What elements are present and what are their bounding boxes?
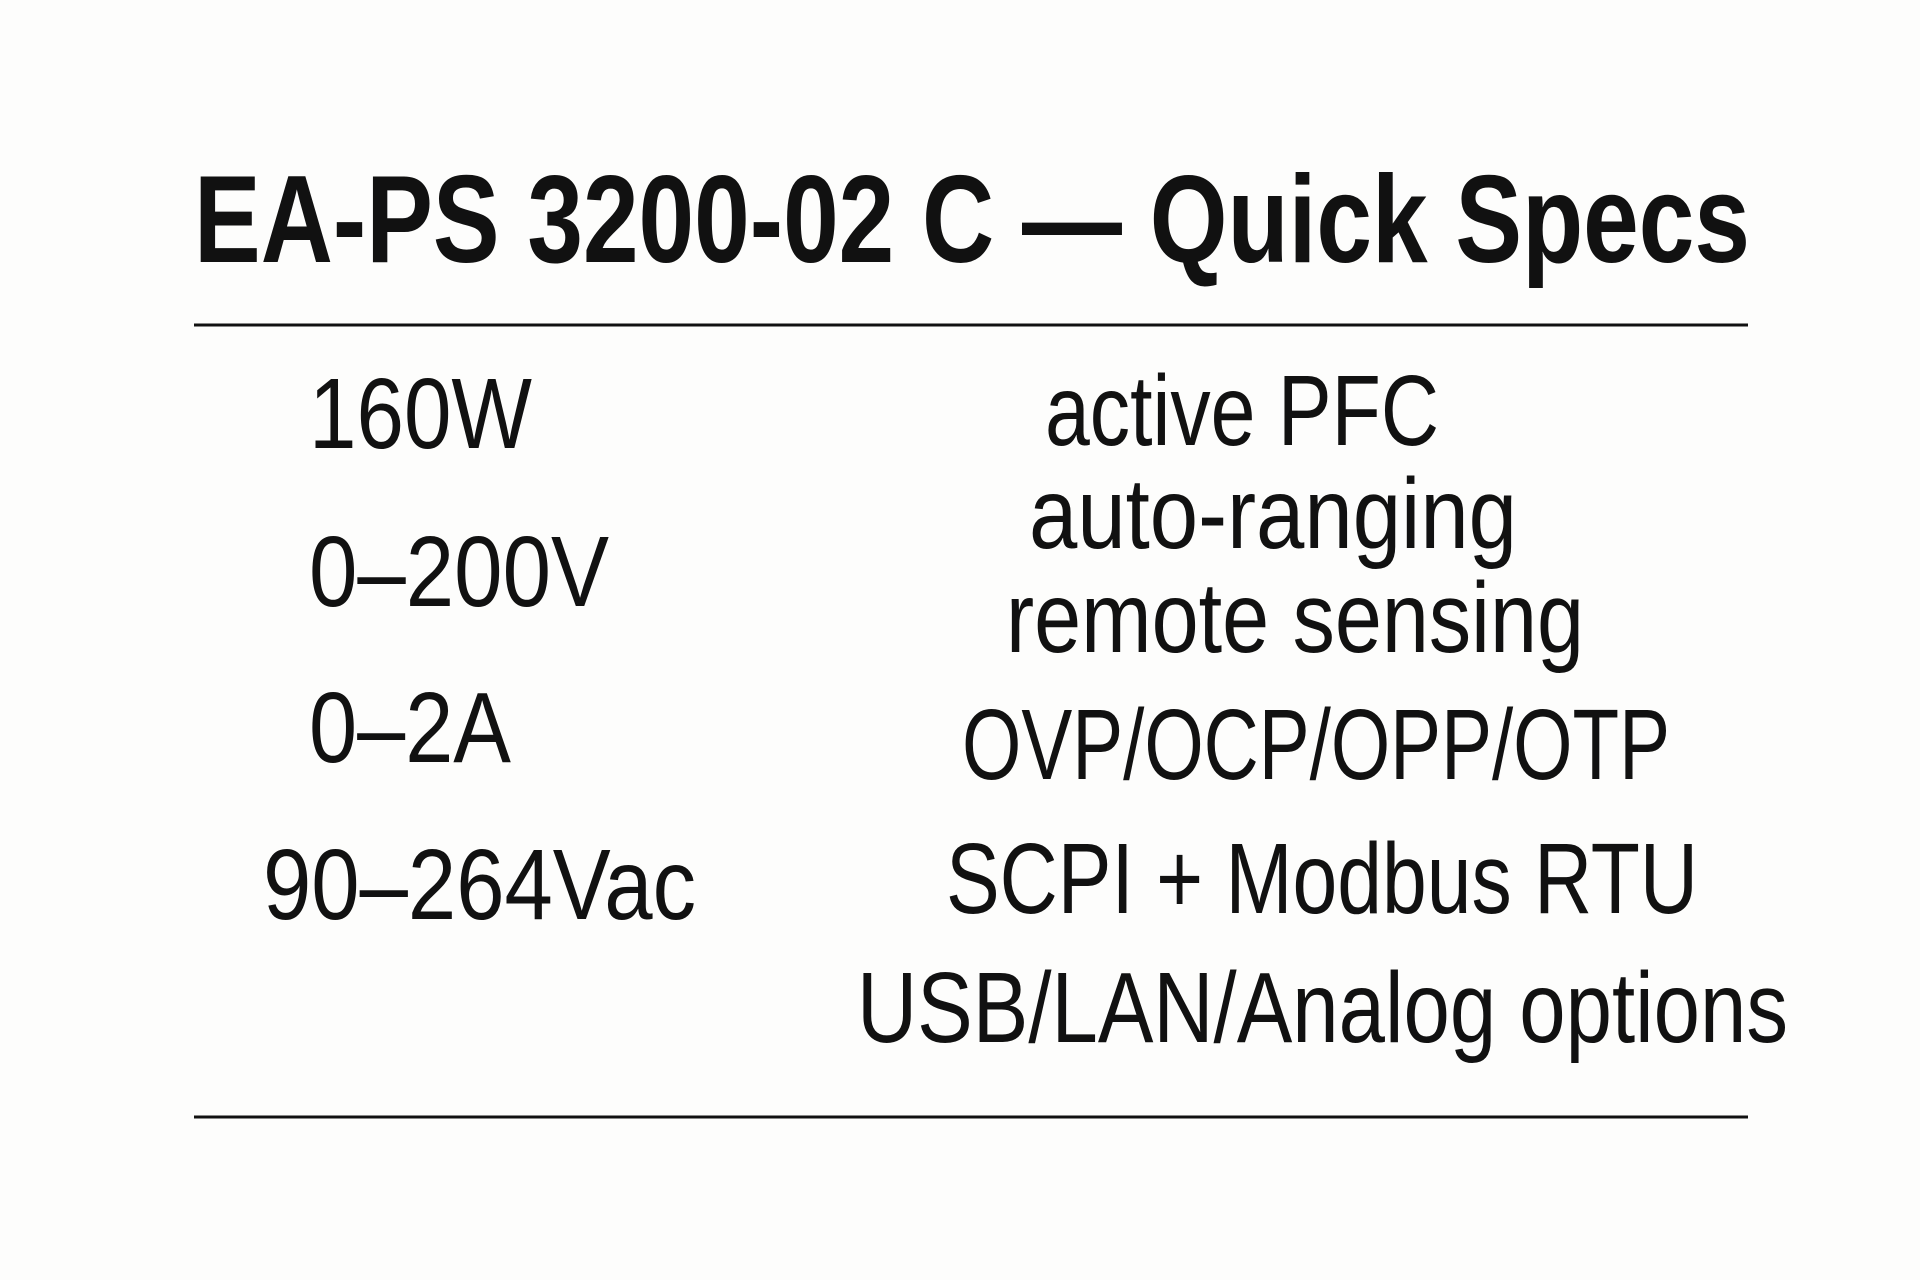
feature: remote sensing: remote sensing <box>1006 562 1584 674</box>
left column: electrical ratings <box>263 358 696 941</box>
feature: PFC: active PFC <box>1045 355 1439 467</box>
right column: features <box>857 355 1788 1064</box>
spec: input: 90–264Vac <box>263 829 696 941</box>
spec: current: 0–2A <box>309 672 511 784</box>
spec: power: 160W <box>309 358 533 470</box>
feature: protocols: SCPI + Modbus RTU <box>946 823 1698 935</box>
feature: auto-ranging: auto-ranging <box>1029 458 1517 570</box>
spec: voltage: 0–200V <box>309 516 609 628</box>
feature: protections: OVP/OCP/OPP/OTP <box>962 689 1670 801</box>
